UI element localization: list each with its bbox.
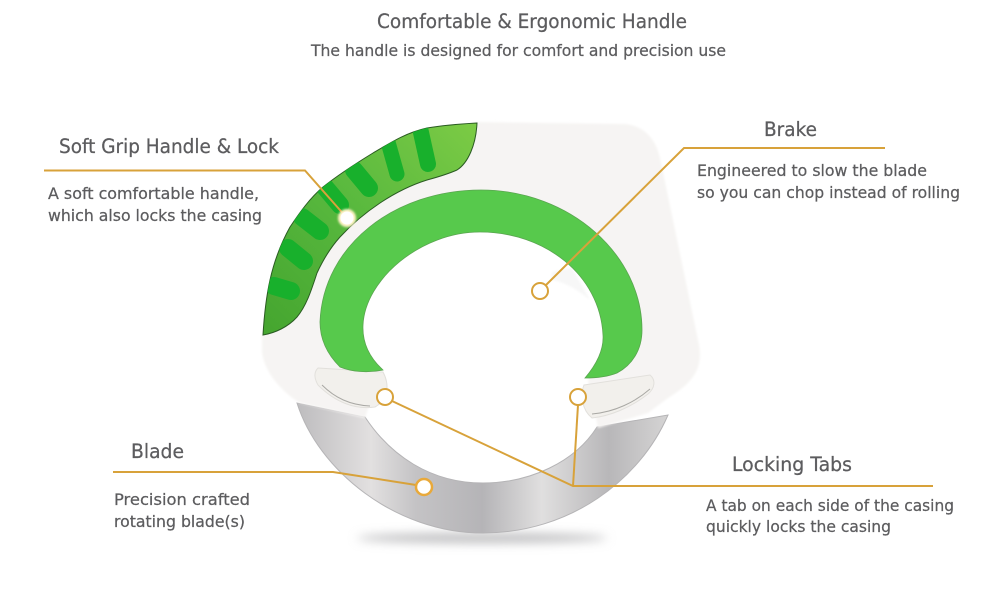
brake shading	[552, 268, 590, 300]
callout: locking tabs: A tab on each side of the casing	[706, 496, 954, 515]
marker: right locking tab	[570, 389, 586, 405]
leader: soft grip handle	[44, 170, 347, 218]
callout: soft grip handle: A soft comfortable handle,	[48, 184, 259, 203]
leader: blade	[113, 472, 416, 485]
callout: blade: Blade	[131, 440, 184, 463]
callout: locking tabs: Locking Tabs	[732, 453, 852, 476]
callout: brake	[697, 118, 960, 202]
marker: left locking tab	[377, 389, 393, 405]
product illustration: rotary cutter	[262, 122, 700, 543]
marker: blade	[416, 479, 432, 495]
leader: locking tabs	[392, 401, 933, 486]
callout: soft grip handle: which also locks the casing	[48, 206, 262, 225]
callout: brake: so you can chop instead of rolling	[697, 183, 960, 202]
callout: locking tabs: quickly locks the casing	[706, 517, 891, 536]
callout: soft grip handle: Soft Grip Handle & Lock	[59, 135, 280, 158]
callout: locking tabs	[706, 453, 954, 536]
title: Comfortable & Ergonomic Handle	[377, 10, 687, 33]
callout: blade: rotating blade(s)	[114, 512, 245, 531]
callout: soft grip handle	[48, 135, 280, 225]
left locking tab	[315, 368, 387, 408]
callout: blade: Precision crafted	[114, 490, 250, 509]
right locking tab	[582, 375, 654, 418]
callout: brake: Brake	[764, 118, 817, 141]
callout: blade	[114, 440, 250, 531]
rotating blade	[297, 403, 668, 533]
callout: brake: Engineered to slow the blade	[697, 161, 927, 180]
grip ribs	[274, 128, 428, 291]
subtitle: The handle is designed for comfort and precision use	[310, 41, 726, 60]
white casing	[262, 122, 700, 428]
marker: soft grip	[338, 209, 356, 227]
green soft grip handle	[263, 123, 477, 335]
blade shadow	[357, 533, 607, 543]
green inner ring	[320, 190, 642, 378]
leader: brake	[545, 148, 885, 286]
marker: brake	[532, 283, 548, 299]
